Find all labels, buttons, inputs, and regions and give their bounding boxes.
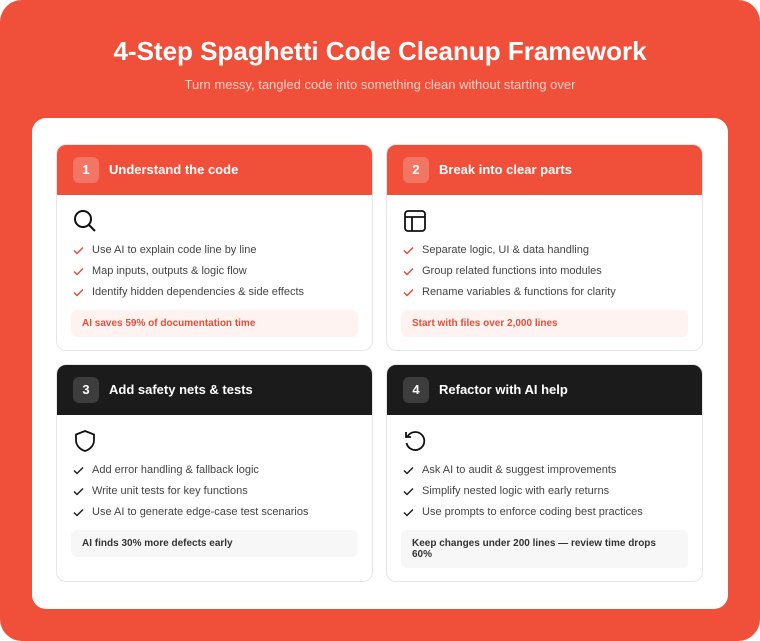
icon: search	[74, 210, 96, 232]
panel: step 2: Break into clear parts	[439, 162, 572, 177]
callout	[71, 310, 358, 337]
panel: step 3: Add safety nets & tests	[109, 382, 253, 397]
icon: shield	[75, 430, 95, 452]
panel: step 3: Add error handling & fallback logic	[92, 464, 259, 476]
callout	[401, 310, 688, 337]
panel: step 4: Use prompts to enforce coding best practices	[422, 506, 643, 518]
panel: step 2: Separate logic, UI & data handling	[422, 244, 589, 256]
callout: Start with files over 2,000 lines	[412, 318, 558, 329]
panel: step 1: 1	[82, 162, 90, 177]
panel: step 2: 2	[412, 162, 420, 177]
panel: step 4: 4	[412, 382, 420, 397]
callout	[71, 530, 358, 557]
panel: step 2: Group related functions into modules	[422, 265, 602, 277]
callout: AI finds 30% more defects early	[82, 538, 233, 549]
subtitle: Turn messy, tangled code into something clean without starting over	[185, 77, 575, 92]
panel: step 1	[56, 144, 373, 351]
callout	[401, 530, 688, 568]
panel: step 1: Map inputs, outputs & logic flow	[92, 265, 247, 277]
panel: step 3: Use AI to generate edge-case test scenarios	[92, 506, 308, 518]
panel: step 1: Understand the code	[109, 162, 238, 177]
title: 4-Step Spaghetti Code Cleanup Framework	[113, 36, 647, 66]
panel: step 4: Refactor with AI help	[439, 382, 568, 397]
panel: step 3	[56, 364, 373, 582]
callout: Keep changes under 200 lines — review time drops 60%	[412, 538, 656, 560]
panel: step 2: Rename variables & functions for clarity	[422, 286, 616, 298]
panel: step 2	[386, 144, 703, 351]
panel: step 3: Write unit tests for key functions	[92, 485, 248, 497]
panel: step 4: Simplify nested logic with early returns	[422, 485, 609, 497]
panel: step 1: Identify hidden dependencies & side effects	[92, 286, 304, 298]
callout: AI saves 59% of documentation time	[82, 318, 255, 329]
icon: layout	[404, 210, 426, 232]
main panel	[32, 118, 728, 609]
panel: step 3: 3	[82, 382, 90, 397]
panel: step 1: Use AI to explain code line by line	[92, 244, 256, 256]
panel: step 4	[386, 364, 703, 582]
icon: refresh	[405, 431, 426, 451]
panel: step 4: Ask AI to audit & suggest improvements	[422, 464, 616, 476]
